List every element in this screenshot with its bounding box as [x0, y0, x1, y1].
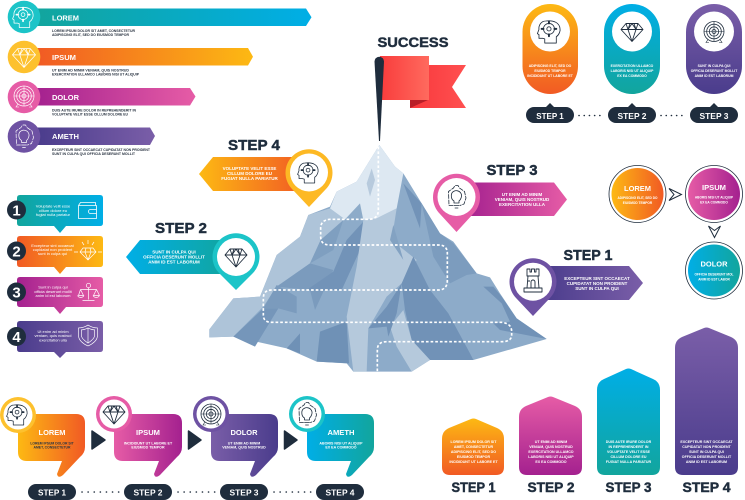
- bubble: lorem: AMET, CONSECTETUR: [34, 446, 71, 450]
- item 2: Excepteur sint occaecat: [31, 243, 75, 248]
- callout: step 3: UT ENIM AD MINIM: [502, 192, 543, 197]
- item 4: [7, 321, 103, 358]
- bar: dolor: DOLOR: [52, 95, 79, 102]
- callout: step 2: OFFICIA DESERUNT MOLLIT: [143, 255, 205, 260]
- arrow: right chevron: [669, 188, 682, 200]
- bubble: dolor: DOLOR: [230, 430, 258, 437]
- callout: step 4: STEP 4: [228, 138, 280, 154]
- bar: step 1: STEP 1: [452, 480, 496, 495]
- capsule: step 3: OFFICIA DESERUNT MOLLIT: [691, 69, 738, 73]
- callout: step 1: [510, 248, 643, 316]
- bar: lorem: [8, 1, 311, 37]
- callout: step 2: [126, 221, 260, 290]
- bar: step 4: OFFICIA DESERUNT MOLLIT: [682, 455, 732, 459]
- capsule: step 1: INCIDIDUNT UT LABORE ET: [527, 74, 574, 78]
- bar: step 2: EXERCITATION ULLAMCO: [528, 450, 574, 454]
- title: success: SUCCESS: [378, 35, 448, 50]
- step pills with dotted connectors: STEP 2: [618, 112, 647, 121]
- callout: step 1: EXCEPTEUR SINT OCCAECAT: [564, 276, 630, 281]
- arrow 2: [188, 431, 201, 449]
- item 4: veniam, quis nostrud: [35, 333, 71, 338]
- bar: step 3: [597, 368, 660, 495]
- bar: ipsum: UT ENIM AD MINIM VENIAM, QUIS NOSTRUD: [52, 68, 130, 72]
- item 3: officia deserunt mollit: [34, 289, 73, 294]
- item 1: cillum dolore eu: [39, 208, 67, 213]
- circle: dolor: ANIM ID EST LABOR: [698, 278, 730, 282]
- bar: step 3: FUGIAT NULLA PARIATUR: [606, 460, 651, 464]
- flag fold: [410, 100, 428, 108]
- bar: dolor: [8, 81, 196, 116]
- callout: step 2: SUNT IN CULPA QUI: [152, 250, 196, 255]
- item 1: fugiat nulla pariatur: [36, 212, 71, 217]
- capsule: step 3: [686, 4, 742, 94]
- bar: step 1: AMET, CONSECTETUR: [454, 445, 493, 449]
- item 4: Ut enim ad minim: [37, 329, 69, 334]
- bar: step 3: CILLUM DOLORE EU: [611, 455, 647, 459]
- circle: dolor: OFFICIA DESERUNT MOL: [694, 272, 734, 276]
- capsule: step 3: SUNT IN CULPA QUI: [698, 64, 730, 68]
- bar: dolor: VOLUPTATE VELIT ESSE CILLUM DOLORE EU: [52, 112, 129, 116]
- flag cloth back: [410, 65, 466, 108]
- callout: step 2: ANIM ID EST LABORUM: [148, 260, 200, 265]
- callout: step 2: STEP 2: [155, 221, 207, 237]
- bar: step 3: VOLUPTATE VELIT ESSE: [607, 450, 651, 454]
- callout: step 1: CUPIDATAT NON PROIDENT: [567, 281, 628, 286]
- bubble: ipsum: INCIDIDUNT UT LABORE ET: [124, 442, 173, 446]
- bubble: ipsum: EIUSMOD TEMPOR: [131, 446, 165, 450]
- capsule: step 1: [522, 4, 578, 94]
- bar: step 3: IN REPREHENDERIT IN: [609, 445, 649, 449]
- bar: ipsum: EXERCITATION ULLAMCO LABORIS NISI UT ALIQUIP: [52, 72, 140, 76]
- step pills bottom: STEP 4: [326, 488, 355, 498]
- item 2: 2: [12, 244, 21, 260]
- item 3: Sunt in culpa qui: [38, 284, 68, 290]
- capsule: step 1: EIUSMOD TEMPOR: [534, 69, 566, 73]
- panel: top left arrow bars: [8, 1, 311, 156]
- panel: circles flow: [609, 166, 742, 299]
- bar: ameth: [8, 120, 155, 156]
- bar: step 1: ADIPISCING ELIT, SED DO: [451, 450, 496, 454]
- bar: ameth: AMETH: [52, 134, 79, 141]
- panel: numbered list: [7, 195, 103, 358]
- bubble: ipsum: IPSUM: [136, 430, 160, 437]
- panel: top right capsules: [522, 4, 742, 123]
- step pills with dotted connectors: STEP 1: [536, 112, 564, 121]
- item 2: cupidatat non proident: [33, 247, 73, 252]
- arrow 1: [92, 431, 105, 449]
- callout: step 3: VENIAM, QUIS NOSTRUD: [495, 197, 550, 202]
- bubble: ameth: [289, 396, 374, 477]
- circle: ipsum: ABORIS NISI UT ALIQUIP: [695, 196, 734, 200]
- bubble: dolor: [193, 396, 278, 477]
- bar: dolor: DUIS AUTE IRURE DOLOR IN REPREHENDERIT IN: [52, 108, 137, 112]
- bubble: dolor: UT ENIM AD MINIM: [228, 442, 260, 446]
- bar: step 2: STEP 2: [528, 480, 574, 495]
- bar: step 2: EX EA COMMODO: [535, 460, 567, 464]
- circle: lorem: EIUSMOD TEMPOR: [623, 201, 653, 205]
- bar: step 2: UT ENIM AD MINIM: [535, 440, 567, 444]
- callout: step 3: [433, 163, 567, 232]
- callout: step 4: FUGIAT NULLA PARIATUR: [221, 176, 279, 181]
- bubble: dolor: VENIAM, QUIS NOSTRUD: [222, 446, 266, 450]
- step pills with dotted connectors: [526, 103, 738, 123]
- item 2: sunt in culpa qui: [38, 251, 67, 256]
- circle: ipsum: EX EA COMMODO: [700, 200, 728, 204]
- item 4: exercitation ulla: [39, 338, 68, 342]
- bar: step 4: STEP 4: [682, 480, 731, 495]
- bar: ipsum: IPSUM: [52, 55, 76, 62]
- bar: step 4: SUNT IN CULPA QUI: [689, 450, 724, 454]
- bar: step 4: CUPIDATAT NON PROIDENT: [682, 445, 732, 449]
- bubble: ameth: ABORIS NISI UT ALIQUIP: [319, 442, 363, 446]
- bar: step 3: DUIS AUTE IRURE DOLOR: [606, 440, 652, 444]
- bar: step 4: ANIM ID EST LABORUM: [686, 460, 727, 464]
- capsule: step 3: ANIM ID EST LABORUM: [695, 74, 734, 78]
- circle: dolor: DOLOR: [700, 262, 728, 268]
- callout: step 1: SUNT IN CULPA QUI: [575, 286, 619, 291]
- mountain: [209, 145, 547, 372]
- item 1: [7, 195, 103, 233]
- callout: step 3: STEP 3: [486, 163, 538, 179]
- callout: step 1: STEP 1: [564, 248, 612, 264]
- capsule: step 1: ADIPISCING ELIT, SED DO: [529, 64, 572, 68]
- bar: step 1: EIUSMOD TEMPOR: [457, 455, 490, 459]
- step pills bottom: [28, 484, 364, 500]
- item 3: [7, 277, 103, 314]
- bubble: ipsum: [96, 396, 182, 477]
- circle: lorem: LOREM: [624, 186, 651, 193]
- bar: step 2: VENIAM, QUIS NOSTRUD: [529, 445, 573, 449]
- flag pole: [374, 57, 384, 141]
- bar: lorem: LOREM IPSUM DOLOR SIT AMET, CONSECTETUR: [52, 29, 136, 33]
- bar: step 1: LOREM IPSUM DOLOR SIT: [451, 440, 497, 444]
- bubble: lorem: [0, 397, 85, 477]
- bar: step 2: LABORIS NISI UT ALIQUIP: [528, 455, 574, 459]
- bar: step 3: STEP 3: [606, 480, 652, 495]
- step pills bottom: STEP 3: [230, 488, 259, 498]
- item 1: 1: [12, 202, 21, 220]
- bubble: ameth: EX EA COMMODO: [325, 446, 357, 450]
- step pills with dotted connectors: STEP 3: [700, 112, 729, 121]
- flag and success title: [374, 35, 466, 141]
- panel: rising bars: [442, 328, 738, 495]
- item 2: [7, 236, 103, 274]
- flag cloth front: [380, 56, 429, 100]
- bar: lorem: LOREM: [52, 16, 79, 22]
- bar: step 1: INCIDIDUNT UT LABORE ET: [449, 460, 498, 464]
- step pills bottom: STEP 2: [134, 488, 163, 498]
- circle: lorem: [609, 166, 666, 222]
- item 4: 4: [12, 329, 21, 346]
- arrow 3: [284, 431, 297, 449]
- bar: ameth: EXCEPTEUR SINT OCCAECAT CUPIDATAT NON PROIDENT: [52, 148, 151, 152]
- bar: ameth: SUNT IN CULPA QUI OFFICIA DESERUNT MOLLIT: [52, 152, 136, 156]
- item 1: Voluptate velit esse: [36, 204, 71, 208]
- bar: step 1: [442, 418, 504, 495]
- item 3: anim id est laborum: [36, 293, 71, 298]
- circle: ipsum: [686, 166, 742, 222]
- circle: dolor: [686, 242, 742, 299]
- circle: lorem: ADIPISCING ELIT, SED DO: [617, 196, 658, 200]
- circle: ipsum: IPSUM: [702, 185, 726, 192]
- capsule: step 2: [604, 4, 660, 94]
- bar: step 4: [675, 328, 738, 495]
- capsule: step 2: EXERCITATION ULLAMCO: [611, 64, 654, 68]
- bar: ipsum: [8, 41, 253, 76]
- callout: step 3: EXERCITATION ULLA: [499, 202, 546, 207]
- capsule: step 2: LABORIS NISI UT ALIQUIP: [611, 69, 654, 73]
- panel: bottom left bubbles: [0, 396, 374, 500]
- bubble: lorem: LOREM IPSUM DOLOR SIT: [30, 442, 75, 446]
- arrow: down chevron: [708, 226, 720, 238]
- bubble: ameth: AMETH: [328, 430, 354, 437]
- step pills bottom: STEP 1: [38, 488, 66, 498]
- callout: step 4: VOLUPTATE VELIT ESSE: [223, 166, 276, 171]
- bar: lorem: ADIPISCING ELIT, SED DO EIUSMOD TEMPOR: [52, 33, 130, 37]
- bar: step 2: [519, 396, 582, 495]
- callout: step 4: [199, 138, 332, 207]
- capsule: step 2: EX EA COMMODO: [617, 74, 647, 78]
- item 3: 3: [12, 284, 21, 302]
- bar: step 4: EXCEPTEUR SINT OCCAECAT: [680, 440, 733, 444]
- callout: step 4: CILLUM DOLORE EU: [227, 171, 272, 176]
- bubble: lorem: LOREM: [38, 430, 66, 437]
